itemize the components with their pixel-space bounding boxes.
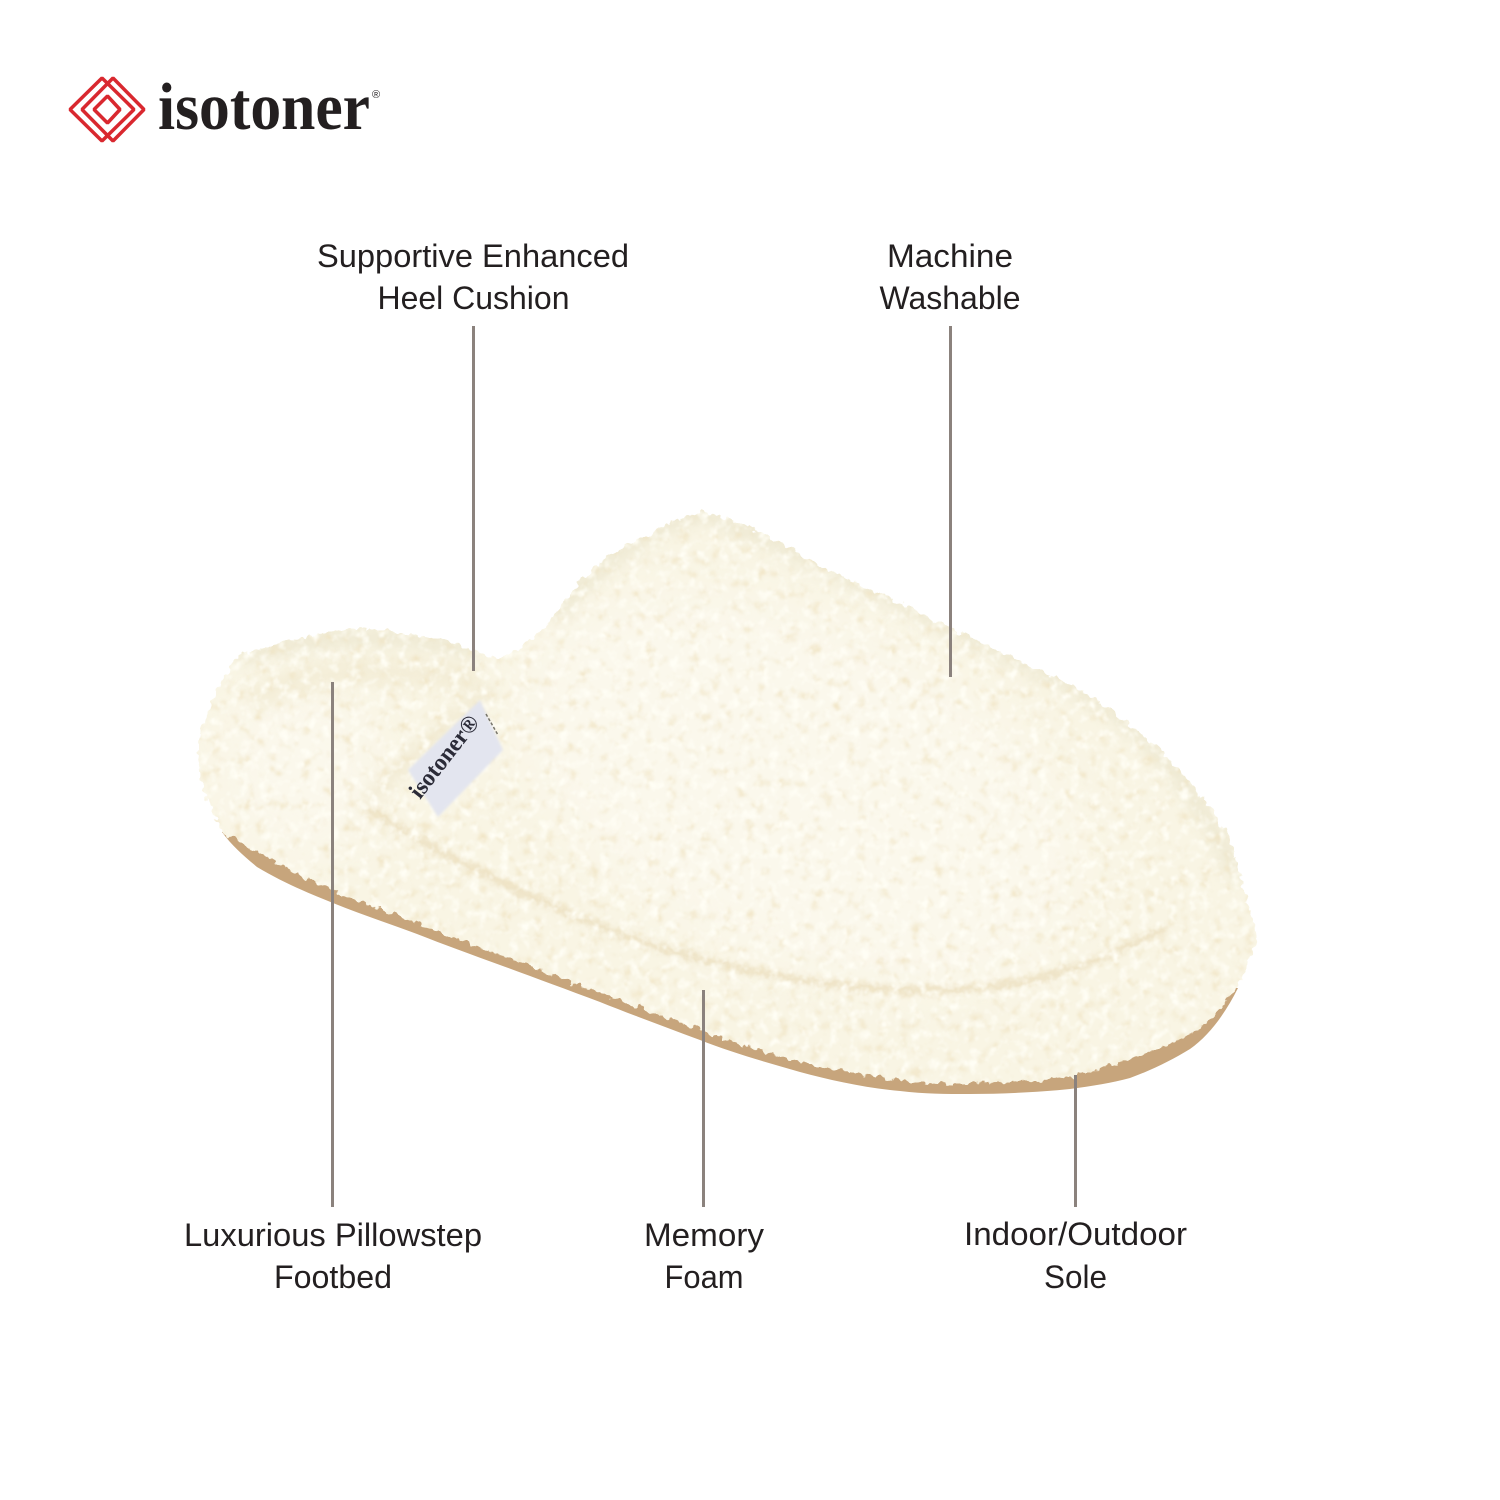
callout: Indoor/Outdoor Sole: Indoor/Outdoor — [964, 1216, 1187, 1252]
slipper body fleece — [197, 512, 1258, 1084]
callout: Supportive Enhanced Heel Cushion: Supportive Enhanced — [317, 238, 629, 274]
callout: Luxurious Pillowstep Footbed — [184, 682, 482, 1295]
icon: red diamond mark — [70, 78, 144, 141]
callout: Machine Washable: Washable — [880, 280, 1020, 316]
brand label tag — [404, 700, 503, 817]
callout: Machine Washable — [880, 238, 1020, 677]
fleece shading — [228, 510, 1242, 997]
logo: isotoner — [70, 70, 380, 144]
upper glow — [457, 513, 1143, 1067]
callout: Supportive Enhanced Heel Cushion: Heel Cushion — [378, 280, 570, 316]
callout: Indoor/Outdoor Sole — [964, 1075, 1187, 1295]
slipper product illustration — [197, 512, 1258, 1094]
logo wordmark: isotoner — [158, 70, 370, 144]
callout: Memory Foam — [644, 990, 765, 1295]
top rim shade — [238, 512, 1240, 880]
callout: Machine Washable: Machine — [887, 238, 1013, 274]
heel cushion hollow — [250, 671, 480, 700]
callout: Indoor/Outdoor Sole: Sole — [1044, 1259, 1107, 1295]
upper opening edge shadow — [368, 690, 490, 800]
footbed glow — [228, 836, 289, 869]
brand label tag: isotoner® — [404, 710, 485, 804]
callout: Luxurious Pillowstep Footbed: Luxurious Pillowstep — [184, 1217, 482, 1253]
callout: Memory Foam: Memory — [644, 1217, 765, 1253]
callout: Supportive Enhanced Heel Cushion — [317, 238, 629, 671]
slipper sole — [222, 800, 1238, 1094]
callout: Memory Foam: Foam — [664, 1259, 744, 1295]
upper edge seam shadow — [365, 805, 1165, 990]
callout: Luxurious Pillowstep Footbed: Footbed — [274, 1259, 392, 1295]
logo registered mark: ® — [372, 89, 380, 101]
